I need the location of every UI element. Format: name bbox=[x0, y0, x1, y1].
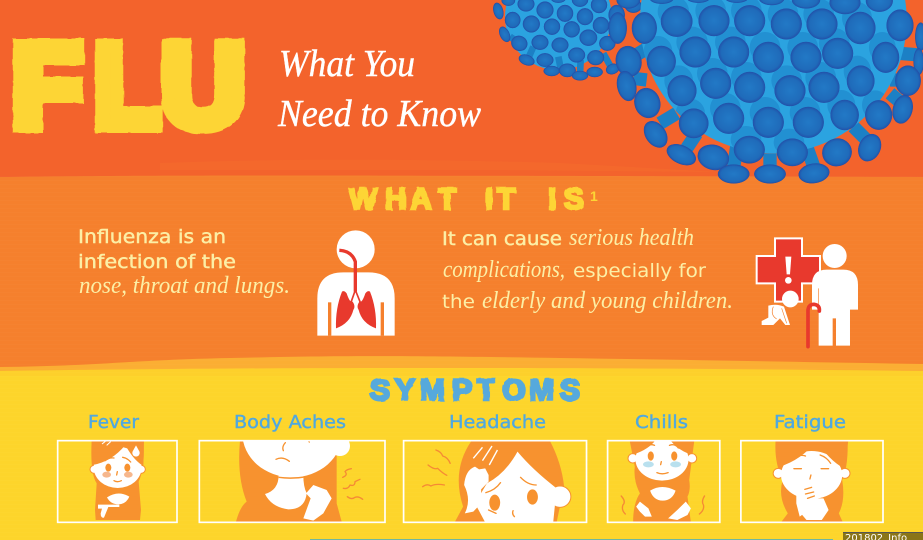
heading: Symptoms: SYMPTOMS bbox=[370, 374, 580, 407]
subtitle: What You Need to Know bbox=[277, 43, 482, 135]
subtitle: What You Need to Know: What You bbox=[279, 43, 415, 85]
text: complications: serious health bbox=[569, 225, 694, 251]
text: complications: elderly and young children. bbox=[482, 288, 733, 314]
heading footnote 1: 1 bbox=[590, 188, 598, 204]
large virus illustration bbox=[609, 0, 923, 185]
file name caption bbox=[843, 532, 923, 540]
small virus spikes bbox=[492, 0, 642, 80]
background: yellow band bbox=[0, 369, 923, 540]
title: FLU: L bbox=[94, 20, 160, 151]
large virus outer spikes bbox=[609, 10, 923, 185]
label: Fever: Fever bbox=[88, 412, 140, 433]
text: influenza definition: nose, throat and lungs. bbox=[79, 273, 290, 299]
text: complications: complications, bbox=[443, 257, 565, 283]
subtitle: What You Need to Know: Need to Know bbox=[277, 93, 482, 135]
icon: person with respiratory system bbox=[317, 230, 395, 336]
small virus illustration bbox=[492, 0, 642, 80]
text: influenza definition: infection of the bbox=[78, 251, 236, 273]
title: FLU: F bbox=[12, 20, 82, 151]
small virus stems bbox=[510, 37, 611, 74]
large virus surface spheres bbox=[647, 0, 899, 166]
text: complications bbox=[442, 225, 733, 314]
small virus body bbox=[505, 0, 612, 70]
background: middle orange band bbox=[0, 176, 923, 372]
panel: fever illustration bbox=[58, 441, 177, 522]
text: influenza definition: Influenza is an bbox=[78, 226, 226, 248]
large virus stems bbox=[633, 47, 920, 170]
label: Chills: Chills bbox=[635, 412, 688, 433]
text: complications: especially for bbox=[573, 260, 706, 282]
icon: medical cross with elderly person and baby bbox=[757, 238, 858, 347]
large virus body bbox=[640, 0, 907, 153]
text: complications: It can cause bbox=[442, 228, 562, 250]
large virus body shading bbox=[644, 0, 896, 156]
label: Headache: Headache bbox=[449, 412, 546, 433]
panel: chills illustration bbox=[608, 438, 720, 522]
label: Body Aches: Body Aches bbox=[234, 412, 346, 433]
panel: headache illustration bbox=[404, 441, 587, 522]
panel: fatigue illustration bbox=[741, 441, 883, 522]
panel: body aches illustration bbox=[198, 440, 386, 524]
title: FLU: U bbox=[161, 20, 245, 151]
bottom edge strip bbox=[310, 539, 833, 540]
background: top orange band bbox=[0, 0, 923, 180]
heading: What It Is: WHATITIS bbox=[349, 183, 584, 216]
text: influenza definition bbox=[78, 226, 290, 299]
background: wave streaks bbox=[0, 160, 923, 540]
text: complications: the bbox=[442, 291, 475, 313]
label: Fatigue: Fatigue bbox=[774, 412, 846, 433]
